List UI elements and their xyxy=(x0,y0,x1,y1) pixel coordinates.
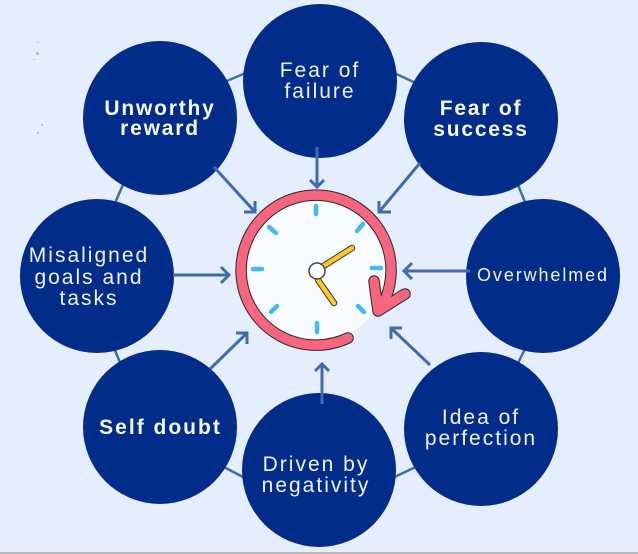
node: Fear of failure: Fear of xyxy=(280,59,360,82)
node: Fear of success: Fear of xyxy=(440,97,522,120)
node: Fear of failure: failure xyxy=(284,80,356,103)
clock face xyxy=(244,198,388,342)
node: Unworthy reward xyxy=(83,41,237,195)
node: Misaligned goals and tasks: Misaligned xyxy=(29,244,149,267)
clock xyxy=(241,195,405,358)
node: Overwhelmed xyxy=(466,199,620,353)
arrow: from top left xyxy=(214,167,255,212)
node: Overwhelmed: Overwhelmed xyxy=(477,265,609,285)
node: Misaligned goals and tasks xyxy=(20,199,174,353)
tick marks xyxy=(253,206,381,332)
node: Driven by negativity: Driven by xyxy=(263,453,369,476)
arrow: from bottom left xyxy=(210,333,247,369)
arrow: from bottom xyxy=(315,364,329,404)
arrow: from right xyxy=(404,263,470,279)
arrow: from left xyxy=(173,267,229,283)
node: Self doubt xyxy=(83,350,237,504)
node: Fear of failure xyxy=(243,4,397,158)
connecting lines between nodes xyxy=(112,72,527,480)
node: Self doubt: Self doubt xyxy=(99,416,222,439)
arrow: from top xyxy=(310,147,324,187)
arrow: from bottom right xyxy=(391,328,430,365)
node: Driven by negativity xyxy=(242,393,396,547)
node: Unworthy reward: Unworthy xyxy=(104,97,216,120)
hub xyxy=(309,263,325,279)
node: Fear of success: success xyxy=(433,118,529,141)
node: Idea of perfection xyxy=(404,352,558,506)
node: Misaligned goals and tasks: tasks xyxy=(59,287,119,310)
pink circular arrow xyxy=(241,195,405,345)
node: Idea of perfection: Idea of xyxy=(442,406,520,429)
node: Unworthy reward: reward xyxy=(120,117,200,140)
node: Fear of success xyxy=(404,42,558,196)
arrows pointing to the clock xyxy=(173,147,470,404)
arrow: from top right xyxy=(379,163,420,212)
node: Misaligned goals and tasks: goals and xyxy=(34,266,144,289)
node: Idea of perfection: perfection xyxy=(425,427,537,450)
hour and minute hands xyxy=(318,248,352,303)
node: Driven by negativity: negativity xyxy=(262,474,370,497)
